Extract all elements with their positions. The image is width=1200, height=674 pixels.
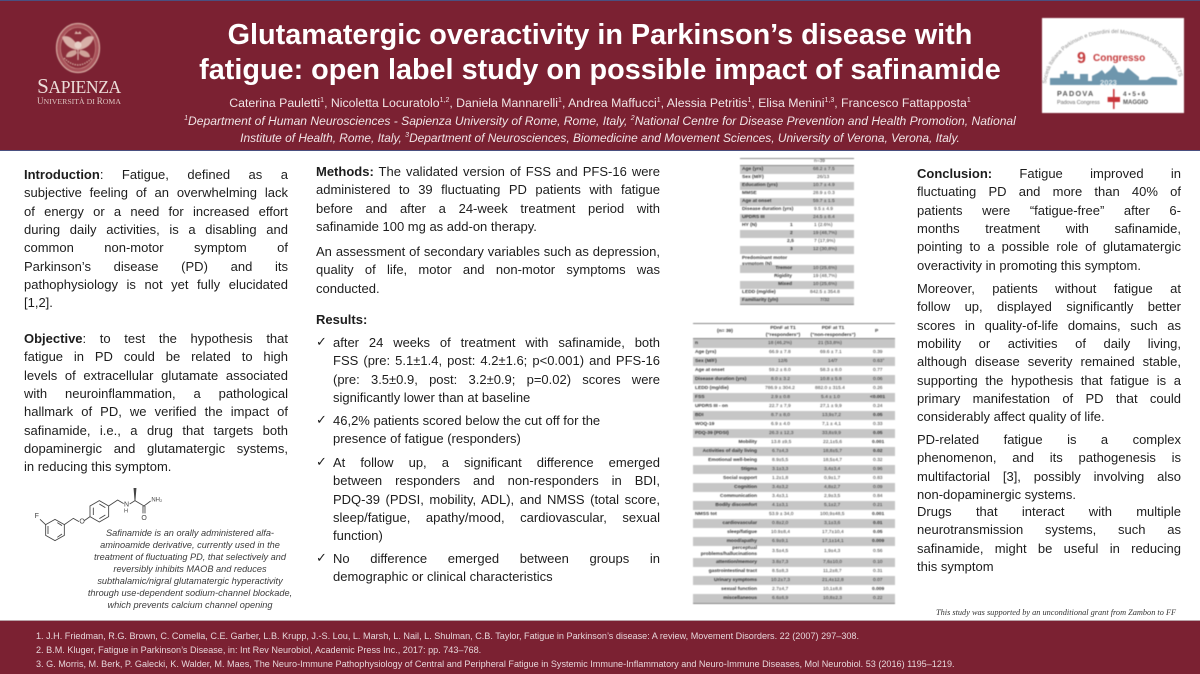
table: responders vs non-responders: Bodily discomfort bbox=[715, 503, 757, 508]
table: responders vs non-responders: 0.09 bbox=[873, 485, 883, 490]
dates bbox=[1123, 91, 1148, 106]
table header row: ("responders") bbox=[766, 333, 800, 338]
header band bbox=[0, 0, 1200, 151]
references: 2. B.M. Kluger, Fatigue in Parkinson’s Disease, in: Int Rev Neurobiol, Academic Press Inc., 2017: pp. 743–768. bbox=[36, 645, 481, 655]
table: responders vs non-responders: Activities of daily living bbox=[703, 449, 757, 454]
logo subtitle: UNIVERSITÀ DI ROMA bbox=[37, 96, 121, 106]
table: responders vs non-responders: 1.2±1,8 bbox=[772, 476, 788, 481]
table: responders vs non-responders: perceptual bbox=[732, 546, 757, 551]
footer band bbox=[0, 620, 1200, 674]
table: responders vs non-responders: Stigma bbox=[741, 467, 757, 472]
table: responders vs non-responders: 69.6 ± 7.1 bbox=[820, 350, 842, 355]
table: responders vs non-responders: 21,4±12,8 bbox=[822, 578, 844, 583]
table: responders vs non-responders: 0.84 bbox=[873, 494, 883, 499]
table: responders vs non-responders: 3.8±7,3 bbox=[772, 560, 788, 565]
table: responders vs non-responders: Cognition bbox=[734, 485, 757, 490]
table: baseline characteristics: 12 (30,8%) bbox=[813, 247, 837, 252]
authors: Caterina Pauletti1, Nicoletta Locuratolo1,2, Daniela Mannarelli1, Andrea Maffucci1, Alessia Petritis1, Elisa Menini1,3, Francesco Fattapposta1 bbox=[229, 96, 971, 110]
table: responders vs non-responders: 0,9±1,7 bbox=[824, 476, 840, 481]
table: baseline characteristics: 26/13 bbox=[817, 175, 829, 180]
text block: conclusion bbox=[917, 166, 1181, 273]
title: fatigue: open label study on possible impact of safinamide bbox=[199, 54, 1001, 86]
table: responders vs non-responders: Communication bbox=[720, 494, 757, 499]
table: responders vs non-responders: sleep/fatigue bbox=[727, 530, 757, 535]
icon: safinamide molecule: H bbox=[124, 509, 128, 515]
table: responders vs non-responders: 0.05 bbox=[873, 431, 883, 436]
table: responders vs non-responders: 6.9±9,1 bbox=[772, 539, 788, 544]
bullet: responders: 46,2% patients scored below the cut off for the bbox=[333, 413, 600, 428]
table: baseline characteristics: LEDD (mg/die) bbox=[742, 290, 776, 295]
venue: Padova Congress bbox=[1057, 100, 1100, 106]
table: baseline characteristics: Age (yrs) bbox=[742, 167, 763, 172]
table: responders vs non-responders: Age at onset bbox=[695, 368, 724, 373]
table: responders vs non-responders: 3,1±3,6 bbox=[824, 521, 840, 526]
caption: safinamide description: aminoamide derivative, currently used in the bbox=[100, 540, 280, 550]
logo: 9th Congress Padova bbox=[1041, 17, 1185, 114]
text block: introduction: [1,2]. bbox=[24, 295, 53, 310]
table: responders vs non-responders bbox=[693, 323, 895, 604]
references: 3. G. Morris, M. Berk, P. Galecki, K. Walder, M. Maes, The Neuro-Immune Pathophysiology of Central and Peripheral Fatigue in Systemic Immune-Inflammatory and Neuro-Immune Diseases, Mol Neurobiol. 53 (2016) 1195–1219. bbox=[36, 659, 955, 669]
text block: objective: levels of extracellular glutamate associated bbox=[24, 368, 288, 383]
table: responders vs non-responders: 3.1±3,3 bbox=[772, 467, 788, 472]
table: responders vs non-responders: 0.22 bbox=[873, 596, 883, 601]
dates: MAGGIO bbox=[1123, 100, 1148, 106]
references bbox=[36, 631, 955, 669]
table: responders vs non-responders: 0.21 bbox=[873, 503, 883, 508]
table: baseline characteristics: Sex (M/F) bbox=[742, 175, 764, 180]
text block: introduction: Parkinson’s disease (PD) and its bbox=[24, 259, 288, 274]
logo: Sapienza University bbox=[37, 22, 122, 106]
text block: quality of life: scores in quality-of-life domains, such as bbox=[917, 318, 1181, 333]
table: responders vs non-responders: 12/6 bbox=[778, 359, 788, 364]
table: responders vs non-responders: 0.009 bbox=[872, 587, 884, 592]
table: responders vs non-responders: 58.3 ± 8.0 bbox=[820, 368, 842, 373]
table: responders vs non-responders: 0.02 bbox=[873, 449, 883, 454]
caption: safinamide description: reversibly inhibits MAOB and reduces bbox=[113, 564, 267, 574]
table: responders vs non-responders: miscellaneous bbox=[723, 596, 757, 601]
text block: quality of life: supporting the hypothesis that fatigue is a bbox=[917, 373, 1181, 388]
dates: 4 • 5 • 6 bbox=[1123, 91, 1146, 98]
table: responders vs non-responders: 882.0 ± 315.4 bbox=[815, 386, 845, 391]
icon: safinamide molecule: O bbox=[141, 515, 147, 522]
icon: safinamide molecule: O bbox=[79, 519, 85, 526]
table: baseline characteristics: 842.5 ± 354.8 bbox=[810, 290, 840, 295]
bullet: follow up: between responders and non-responders in BDI, bbox=[333, 473, 660, 488]
text block: introduction: subjective feeling of an overwhelming lack bbox=[24, 185, 288, 200]
table: responders vs non-responders: 5.4 ± 1.0 bbox=[821, 395, 840, 400]
table: responders vs non-responders: 0.77 bbox=[873, 368, 883, 373]
table: baseline characteristics: 10 (25,6%) bbox=[813, 282, 837, 287]
table: responders vs non-responders: Mobility bbox=[739, 440, 757, 445]
caption: safinamide description: through use-dependent sodium-channel blockade, bbox=[88, 588, 292, 598]
table: baseline characteristics: 19 (48,7%) bbox=[813, 274, 837, 279]
affiliations bbox=[184, 114, 1016, 145]
text block: conclusion: Conclusion: Fatigue improved in bbox=[917, 166, 1181, 181]
table: responders vs non-responders: 66.9 ± 7.8 bbox=[769, 350, 791, 355]
table: responders vs non-responders: 0.8±2,0 bbox=[772, 521, 788, 526]
icon: red cross bbox=[1108, 89, 1120, 109]
caption: safinamide description: which prevents calcium channel opening bbox=[108, 600, 272, 610]
table: responders vs non-responders: 11,2±8,7 bbox=[823, 569, 842, 574]
table: baseline characteristics: 1 (2.6%) bbox=[814, 223, 832, 228]
table: responders vs non-responders: LEDD (mg/die) bbox=[695, 386, 729, 391]
bullet: FSS and PFS-16: significantly lower than at baseline bbox=[333, 390, 530, 405]
table: baseline characteristics: 10 (25,6%) bbox=[813, 266, 837, 271]
table: responders vs non-responders: 100,9±48,5 bbox=[820, 512, 844, 517]
table: responders vs non-responders: 0.26 bbox=[873, 386, 883, 391]
table: responders vs non-responders: Sex (M/F) bbox=[695, 359, 717, 364]
table: responders vs non-responders: <0.001 bbox=[870, 395, 885, 400]
text: ✓ bbox=[316, 551, 327, 566]
table: responders vs non-responders: 7,1 ± 4,1 bbox=[822, 422, 841, 427]
table: baseline characteristics bbox=[740, 157, 854, 305]
bullet: FSS and PFS-16: FSS (pre: 5.1±1.4, post: 4.2±1.6; p<0.001) and PFS-16 bbox=[333, 353, 660, 368]
text: ✓ bbox=[316, 413, 327, 428]
table: responders vs non-responders: 17,7±10,4 bbox=[822, 530, 844, 535]
text block: introduction: pathophysiology is not yet fully elucidated bbox=[24, 277, 288, 292]
table: responders vs non-responders: 7,6±10,0 bbox=[823, 560, 842, 565]
text: ✓ bbox=[316, 455, 327, 470]
table header row: P bbox=[875, 329, 878, 334]
table: responders vs non-responders: 8.0 ± 3.2 bbox=[771, 377, 790, 382]
logo wordmark: SAPIENZA bbox=[37, 74, 121, 98]
text block: methods: Methods: The validated version of FSS and PFS-16 were bbox=[316, 164, 660, 179]
table: baseline characteristics: Age at onset bbox=[742, 199, 771, 204]
table: responders vs non-responders: 3.4±3,2 bbox=[772, 485, 788, 490]
table: responders vs non-responders: 0.24 bbox=[873, 404, 883, 409]
table: responders vs non-responders: 2,9±3,5 bbox=[824, 494, 840, 499]
text block: objective: safinamide, i.e., a drug that targets both bbox=[24, 423, 288, 438]
references: 1. J.H. Friedman, R.G. Brown, C. Comella, C.E. Garber, L.B. Krupp, J.-S. Lou, L. Marsh, L. Nail, L. Shulman, C.B. Taylor, Fatigue in Parkinson’s disease: A review, Movement Disorders. 22 (2007) 297–308. bbox=[36, 631, 859, 641]
table: responders vs non-responders: 5,1±2,7 bbox=[824, 503, 840, 508]
text block: drugs bbox=[917, 504, 1181, 574]
table: baseline characteristics: 9.5 ± 4.9 bbox=[814, 207, 833, 212]
table: responders vs non-responders: 22.7 ± 7,9 bbox=[769, 404, 791, 409]
bullet: no difference: No difference emerged between groups in bbox=[333, 551, 660, 566]
text block: methods: before and after a 24-week treatment period with bbox=[316, 201, 660, 216]
bullet: responders bbox=[316, 413, 600, 446]
caption: safinamide description: subthalamic/nigral glutamatergic hyperactivity bbox=[97, 576, 283, 586]
table: responders vs non-responders: 6.9 ± 4.0 bbox=[771, 422, 790, 427]
table: responders vs non-responders: attention/memory bbox=[716, 560, 757, 565]
text block: pathogenesis bbox=[917, 432, 1181, 502]
table: responders vs non-responders: 10.2±7,3 bbox=[771, 578, 790, 583]
table: baseline characteristics: Rigidity bbox=[774, 274, 792, 279]
table: responders vs non-responders: 14/7 bbox=[828, 359, 838, 364]
table: responders vs non-responders: 22,1±5,6 bbox=[823, 440, 842, 445]
table: baseline characteristics: Education (yrs) bbox=[742, 183, 778, 188]
icon: safinamide molecule: F bbox=[35, 513, 39, 520]
affiliations: 1Department of Human Neurosciences - Sapienza University of Rome, Rome, Italy, 2National Centre for Disease Prevention and Health Promotion, National bbox=[184, 114, 1016, 128]
table: responders vs non-responders: 59.2 ± 8.0 bbox=[769, 368, 791, 373]
table: baseline characteristics: 28.9 ± 0.3 bbox=[813, 191, 835, 196]
text block: quality of life: although disease severity remained stable, bbox=[917, 354, 1181, 369]
text block: objective bbox=[24, 331, 288, 474]
table: responders vs non-responders: 0.31 bbox=[873, 569, 883, 574]
table: responders vs non-responders: 8.5±8,3 bbox=[772, 569, 788, 574]
table: baseline characteristics: UPDRS III bbox=[742, 215, 765, 220]
text block: introduction: common non-motor symptom of bbox=[24, 240, 288, 255]
text block: secondary variables bbox=[316, 244, 660, 296]
table: responders vs non-responders: Emotional well-being bbox=[708, 458, 757, 463]
table: responders vs non-responders: UPDRS III - on bbox=[695, 404, 728, 409]
bullet: follow up: PDQ-39 (PDSI, mobility, ADL), and NMSS (total score, bbox=[333, 492, 660, 507]
text block: secondary variables: An assessment of secondary variables such as depression, bbox=[316, 244, 660, 259]
heading: results: Results: bbox=[316, 312, 367, 327]
table: responders vs non-responders: problems/hallucinations bbox=[701, 552, 757, 557]
text block: objective: with neuroinflammation, a pathological bbox=[24, 386, 288, 401]
table: baseline characteristics: 68.2 ± 7.5 bbox=[813, 167, 835, 172]
text block: drugs: neurotransmission systems, such as bbox=[917, 522, 1181, 537]
table: responders vs non-responders: BDI bbox=[695, 413, 703, 418]
table: responders vs non-responders: 10,8±2,3 bbox=[823, 596, 842, 601]
text block: quality of life: mobility or activities of daily living, bbox=[917, 336, 1181, 351]
text block: quality of life bbox=[917, 281, 1181, 424]
table: responders vs non-responders: 0.05 bbox=[873, 530, 883, 535]
title bbox=[199, 19, 1001, 86]
table: responders vs non-responders: 0.01 bbox=[873, 521, 883, 526]
caption: safinamide description: Safinamide is an orally administered alfa- bbox=[106, 528, 274, 538]
table: responders vs non-responders: 0.06 bbox=[873, 377, 883, 382]
table: responders vs non-responders: 18 (46,2%) bbox=[768, 341, 792, 346]
table: responders vs non-responders: 0.56 bbox=[873, 549, 883, 554]
table: responders vs non-responders: 3.5±4,5 bbox=[772, 549, 788, 554]
table: responders vs non-responders: 0.009 bbox=[872, 539, 884, 544]
text block: conclusion: pointing to a possible role of glutamatergic bbox=[917, 239, 1181, 254]
text block: objective: fatigue in PD could be related to high bbox=[24, 349, 288, 364]
icon: safinamide molecule: N bbox=[124, 501, 129, 508]
table: baseline characteristics: 2,5 bbox=[787, 239, 794, 244]
skyline bbox=[1050, 65, 1177, 85]
table: baseline characteristics: 24.5 ± 8.4 bbox=[813, 215, 835, 220]
table: responders vs non-responders: 2.9 ± 0.8 bbox=[771, 395, 790, 400]
table: responders vs non-responders: 0.32 bbox=[873, 458, 883, 463]
table: responders vs non-responders: 13.8 ±9,5 bbox=[771, 440, 791, 445]
table: responders vs non-responders: 10.8 ± 5.8 bbox=[820, 377, 842, 382]
congress heading: 9 bbox=[1077, 50, 1086, 67]
table: baseline characteristics: 3 bbox=[790, 247, 793, 252]
table: responders vs non-responders: 4.1±3,1 bbox=[772, 503, 788, 508]
venue: PADOVA bbox=[1057, 89, 1094, 98]
table: responders vs non-responders: 0.63° bbox=[873, 359, 884, 364]
table: responders vs non-responders: mood/apathy bbox=[727, 539, 757, 544]
funding note: This study was supported by an unconditional grant from Zambon to FF bbox=[936, 608, 1176, 617]
bullet: follow up bbox=[316, 455, 660, 543]
text block: drugs: safinamide, might be useful in reducing bbox=[917, 541, 1181, 556]
table: responders vs non-responders: 1,9±4,3 bbox=[824, 549, 840, 554]
text block: quality of life: Moreover, patients without fatigue at bbox=[917, 281, 1181, 296]
arc society name: Società Italiana Parkinson e Disordini del Movimento/LIMPE-DISMOV ETS bbox=[1042, 28, 1183, 84]
bullet: follow up: At follow up, a significant difference emerged bbox=[333, 455, 660, 470]
table: responders vs non-responders: Urinary symptoms bbox=[714, 578, 757, 583]
text block: drugs: this symptom bbox=[917, 559, 994, 574]
table header row: PDF at T1 bbox=[822, 326, 844, 331]
text block: conclusion: fluctuating PD and more than 40% of bbox=[917, 184, 1181, 199]
table: baseline characteristics: Predominant motor symptom (N) bbox=[742, 256, 787, 266]
text block: methods bbox=[316, 164, 660, 234]
text block: conclusion: overactivity in promoting this symptom. bbox=[917, 258, 1141, 273]
text block: pathogenesis: non-dopaminergic systems. bbox=[917, 487, 1076, 502]
table: responders vs non-responders: 6.6±6,9 bbox=[772, 596, 788, 601]
table: responders vs non-responders: 0.39 bbox=[873, 350, 883, 355]
table: responders vs non-responders: 786.9 ± 304.2 bbox=[765, 386, 795, 391]
table: responders vs non-responders: 18,8±5,7 bbox=[823, 449, 842, 454]
caption: safinamide description: treatment of fluctuating PD, that selectively and bbox=[94, 552, 286, 562]
text block: pathogenesis: phenomenon, and its pathogenesis is bbox=[917, 450, 1181, 465]
table header row: ("non-responders") bbox=[810, 333, 856, 338]
table: responders vs non-responders: sexual function bbox=[721, 587, 757, 592]
bullet: FSS and PFS-16 bbox=[316, 335, 660, 405]
table: responders vs non-responders: 0.001 bbox=[872, 440, 884, 445]
table: responders vs non-responders: 8.9±5,5 bbox=[772, 458, 788, 463]
text block: objective: Objective: to test the hypothesis that bbox=[24, 331, 288, 346]
text block: objective: hallmark of PD, we verified the impact of bbox=[24, 404, 288, 419]
table: responders vs non-responders: 21 (53,8%) bbox=[818, 341, 842, 346]
table: baseline characteristics: 10.7 ± 4.9 bbox=[813, 183, 835, 188]
table: baseline characteristics: 19 (48,7%) bbox=[813, 231, 837, 236]
table: baseline characteristics: Mixed bbox=[778, 282, 792, 287]
table: responders vs non-responders: Age (yrs) bbox=[695, 350, 716, 355]
table: responders vs non-responders: 6.7±4,3 bbox=[772, 449, 788, 454]
table: responders vs non-responders: 0.96 bbox=[873, 467, 883, 472]
text block: objective: dopaminergic and glutamatergic systems, bbox=[24, 441, 288, 456]
table: responders vs non-responders: 0.001 bbox=[872, 512, 884, 517]
text block: introduction: during daily activities, is a disabling and bbox=[24, 222, 288, 237]
table: responders vs non-responders: NMSS tot bbox=[695, 512, 717, 517]
table: baseline characteristics: 59.7 ± 1.5 bbox=[813, 199, 835, 204]
table: responders vs non-responders: 17,1±14,1 bbox=[822, 539, 844, 544]
text block: quality of life: follow up, displayed significantly better bbox=[917, 299, 1181, 314]
text block: introduction: Introduction: Fatigue, defined as a bbox=[24, 167, 288, 182]
table: responders vs non-responders: PDQ-39 (PDSI) bbox=[695, 431, 729, 436]
table: responders vs non-responders: n bbox=[695, 341, 698, 346]
table: responders vs non-responders: 8.7 ± 8,0 bbox=[771, 413, 790, 418]
text block: objective: in reducing this symptom. bbox=[24, 459, 171, 474]
table: baseline characteristics: 1 bbox=[790, 223, 793, 228]
bullet: responders: presence of fatigue (responders) bbox=[333, 431, 521, 446]
caption: safinamide description bbox=[88, 528, 292, 610]
table: responders vs non-responders: 4,8±2,7 bbox=[824, 485, 840, 490]
icon: Sapienza seal bbox=[55, 22, 101, 74]
text block: pathogenesis: PD-related fatigue is a complex bbox=[917, 432, 1181, 447]
table: baseline characteristics: MMSE bbox=[742, 191, 757, 196]
table: responders vs non-responders: Disease duration (yrs) bbox=[695, 377, 746, 382]
table: baseline characteristics: Tremor bbox=[775, 266, 792, 271]
table: responders vs non-responders: 10,1±8,8 bbox=[823, 587, 842, 592]
title: Glutamatergic overactivity in Parkinson’s disease with bbox=[228, 19, 972, 51]
bullet: no difference: demographic or clinical characteristics bbox=[333, 569, 553, 584]
table header row bbox=[716, 325, 879, 338]
table: responders vs non-responders: FSS bbox=[695, 395, 705, 400]
table: responders vs non-responders: 0.10 bbox=[873, 560, 883, 565]
congress heading: Congresso bbox=[1093, 53, 1145, 64]
text block: drugs: Drugs that interact with multiple bbox=[917, 504, 1181, 519]
table: responders vs non-responders: 10.9±8,4 bbox=[771, 530, 790, 535]
text block: introduction: of energy or a need for increased effort bbox=[24, 204, 288, 219]
text block: conclusion: months treatment with safinamide, bbox=[917, 221, 1181, 236]
table: responders vs non-responders: 0.05 bbox=[873, 413, 883, 418]
table: responders vs non-responders: 3.4±3,1 bbox=[772, 494, 788, 499]
table: responders vs non-responders: 26.3 ± 12,3 bbox=[769, 431, 793, 436]
table: responders vs non-responders: 3,4±3,4 bbox=[824, 467, 840, 472]
table: responders vs non-responders: cardiovascular bbox=[722, 521, 757, 526]
table: baseline characteristics: Familiarity (y/n) bbox=[742, 298, 778, 303]
text block: secondary variables: quality of life, motor and non-motor symptoms was bbox=[316, 262, 660, 277]
icon: safinamide molecule bbox=[35, 488, 163, 542]
table: baseline characteristics: 7/32 bbox=[820, 298, 830, 303]
text: ✓ bbox=[316, 335, 327, 350]
text block: quality of life: considerably affect quality of life. bbox=[917, 409, 1105, 424]
table: responders vs non-responders: 53.9 ± 34,0 bbox=[769, 512, 793, 517]
table: responders vs non-responders: 18,5±4,7 bbox=[823, 458, 842, 463]
bullet: FSS and PFS-16: (pre: 3.5±0.9, post: 3.2±0.9; p=0.02) scores were bbox=[333, 372, 660, 387]
table header row: PDnF at T1 bbox=[770, 326, 796, 331]
text block: secondary variables: conducted. bbox=[316, 281, 380, 296]
table: responders vs non-responders: Social support bbox=[723, 476, 757, 481]
table: baseline characteristics: 2 bbox=[790, 231, 793, 236]
text block: introduction bbox=[24, 167, 288, 310]
table: responders vs non-responders: 33,8±9,9 bbox=[822, 431, 841, 436]
table: responders vs non-responders: 0.83 bbox=[873, 476, 883, 481]
table: baseline characteristics: HY (N) bbox=[742, 223, 757, 228]
table: responders vs non-responders: 2.7±4,7 bbox=[772, 587, 788, 592]
text block: pathogenesis: multifactorial [3], possibly involving also bbox=[917, 469, 1181, 484]
congress heading bbox=[1077, 50, 1145, 67]
affiliations: Institute of Health, Rome, Italy, 3Department of Neurosciences, Biomedicine and Movement Sciences, University of Verona, Verona, Italy. bbox=[240, 131, 960, 145]
year: 2023 bbox=[1100, 78, 1117, 87]
text block: quality of life: primary manifestation of PD that could bbox=[917, 391, 1181, 406]
bullet: FSS and PFS-16: after 24 weeks of treatment with safinamide, both bbox=[333, 335, 660, 350]
table: responders vs non-responders: 0.07 bbox=[873, 578, 883, 583]
text block: methods: administered to 39 fluctuating PD patients with fatigue bbox=[316, 182, 660, 197]
table header row: (n= 39) bbox=[717, 329, 733, 334]
table: responders vs non-responders: WOQ-19 bbox=[695, 422, 714, 427]
table: baseline characteristics: n=39 bbox=[814, 159, 825, 164]
text block: methods: safinamide 100 mg as add-on therapy. bbox=[316, 219, 537, 234]
bullet: no difference bbox=[316, 551, 660, 584]
bullet: follow up: sleep/fatigue, apathy/mood, cardiovascular, sexual bbox=[333, 510, 660, 525]
text block: conclusion: patients were “fatigue-free” after 6- bbox=[917, 203, 1181, 218]
table: responders vs non-responders: 27,1 ± 9,9 bbox=[820, 404, 842, 409]
venue bbox=[1057, 89, 1100, 106]
table: responders vs non-responders: gastrointestinal tract bbox=[709, 569, 757, 574]
bullet: follow up: function) bbox=[333, 528, 383, 543]
icon: safinamide molecule: NH₂ bbox=[151, 497, 163, 503]
table: baseline characteristics: 7 (17,9%) bbox=[814, 239, 835, 244]
table: responders vs non-responders: 13,9±7,2 bbox=[822, 413, 841, 418]
table: baseline characteristics: Disease duration (yrs) bbox=[742, 207, 793, 212]
table: responders vs non-responders: 0.33 bbox=[873, 422, 883, 427]
